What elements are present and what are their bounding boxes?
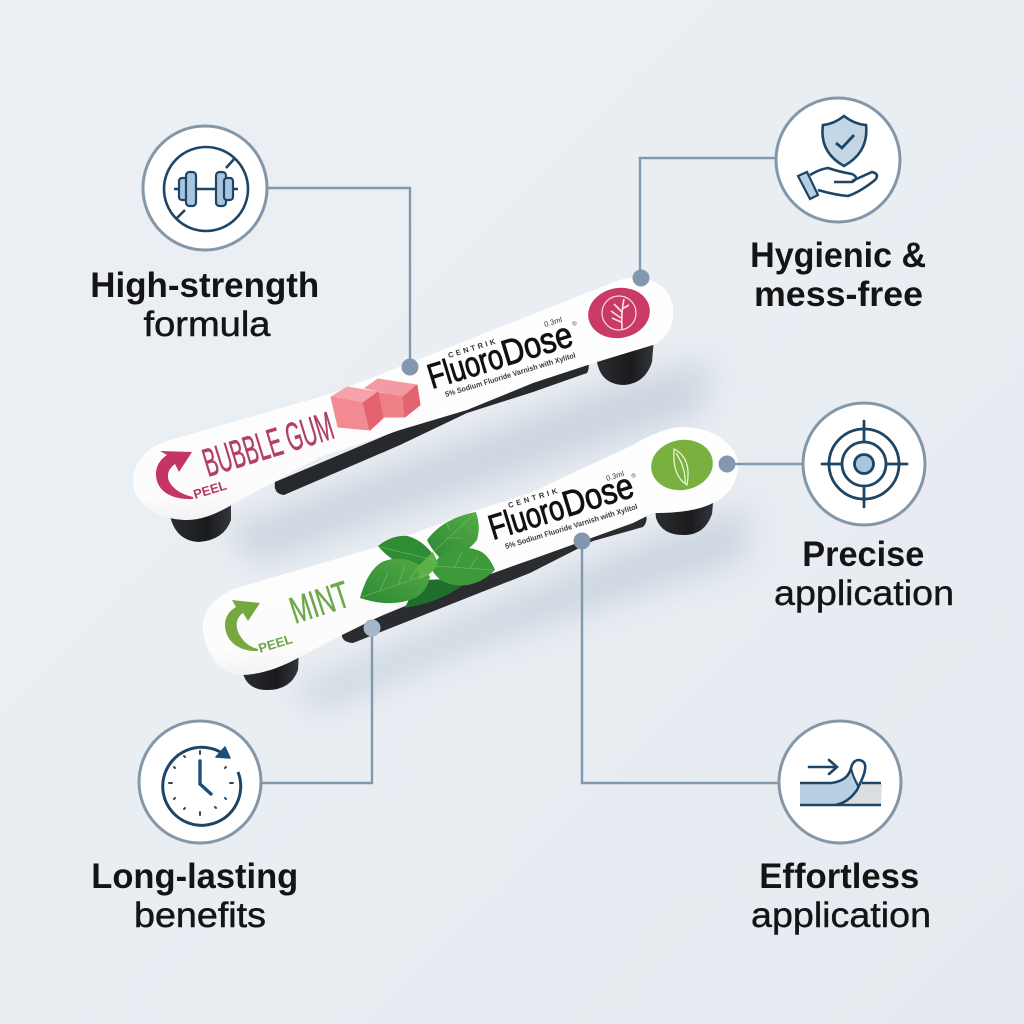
icon: crossed-out dumbbell bbox=[143, 126, 267, 250]
label: High-strength formula: High-strength bbox=[90, 266, 319, 305]
brand block: mint: CENTRIK bbox=[507, 486, 559, 510]
flavour badge: mint bbox=[647, 435, 717, 495]
brand block: bubble gum: 5% Sodium Fluoride Varnish with Xylitol bbox=[444, 351, 577, 399]
label: Effortless application: Effortless bbox=[759, 857, 919, 896]
brand block: bubble gum: ® bbox=[572, 320, 578, 328]
mint strip feet bbox=[242, 493, 714, 690]
feature: long-lasting benefits bbox=[91, 721, 303, 935]
label: Hygienic & mess-free: Hygienic & bbox=[750, 236, 926, 275]
icon: target bbox=[803, 403, 925, 525]
peel arrow: mint bbox=[225, 600, 260, 651]
product shadows bbox=[220, 360, 750, 710]
product: bubble gum strip bbox=[133, 278, 673, 542]
icon: shield over hand bbox=[776, 98, 900, 222]
brand block: mint: 5% Sodium Fluoride Varnish with Xylitol bbox=[504, 502, 639, 551]
feature: hygienic and mess-free bbox=[750, 98, 936, 314]
peel label: bubble gum: PEEL bbox=[191, 478, 228, 502]
label: Hygienic & mess-free: mess-free bbox=[754, 275, 923, 314]
brand block: bubble gum: 0.3ml bbox=[543, 315, 563, 329]
mint strip white body bbox=[203, 427, 738, 675]
connector lines bbox=[262, 158, 803, 783]
label: Long-lasting benefits: benefits bbox=[134, 896, 266, 935]
brand block: mint: 0.3ml bbox=[605, 469, 625, 483]
gum cubes bbox=[331, 379, 420, 430]
label: Effortless application: application bbox=[751, 896, 931, 935]
icon: clock with arrow bbox=[139, 721, 261, 843]
feature: precise application bbox=[774, 403, 954, 613]
bubble gum strip feet bbox=[170, 338, 654, 542]
brand block: mint: Dose bbox=[557, 464, 638, 525]
brand block: bubble gum: Fluoro bbox=[423, 337, 508, 397]
label: High-strength formula: formula bbox=[144, 305, 271, 344]
flavour name: mint: MINT bbox=[285, 574, 355, 633]
brand block: mint bbox=[484, 464, 639, 551]
brand block: bubble gum bbox=[423, 313, 578, 399]
label: Long-lasting benefits: Long-lasting bbox=[91, 857, 298, 896]
brand block: bubble gum: CENTRIK bbox=[447, 337, 497, 360]
label: Precise application: Precise bbox=[802, 535, 924, 574]
brand block: bubble gum: Dose bbox=[496, 313, 577, 374]
product: mint strip bbox=[203, 427, 738, 690]
feature: effortless application bbox=[751, 721, 931, 935]
bubble gum strip white body bbox=[133, 278, 673, 520]
brand block: mint: Fluoro bbox=[484, 488, 569, 548]
peel label: mint: PEEL bbox=[256, 631, 294, 656]
feature: high-strength formula bbox=[90, 126, 324, 344]
mint strip black backing bbox=[342, 514, 647, 643]
flavour name: bubble gum: BUBBLE GUM bbox=[198, 404, 339, 486]
brand block: mint: ® bbox=[631, 472, 637, 480]
flavour badge: bubble gum bbox=[584, 283, 654, 343]
peel arrow: bubble gum bbox=[156, 451, 193, 499]
connector dots bbox=[364, 270, 736, 636]
bubble gum strip black backing bbox=[275, 360, 589, 495]
label: Precise application: application bbox=[774, 574, 954, 613]
mint leaves bbox=[360, 512, 495, 608]
icon: peeling layer bbox=[779, 721, 901, 843]
